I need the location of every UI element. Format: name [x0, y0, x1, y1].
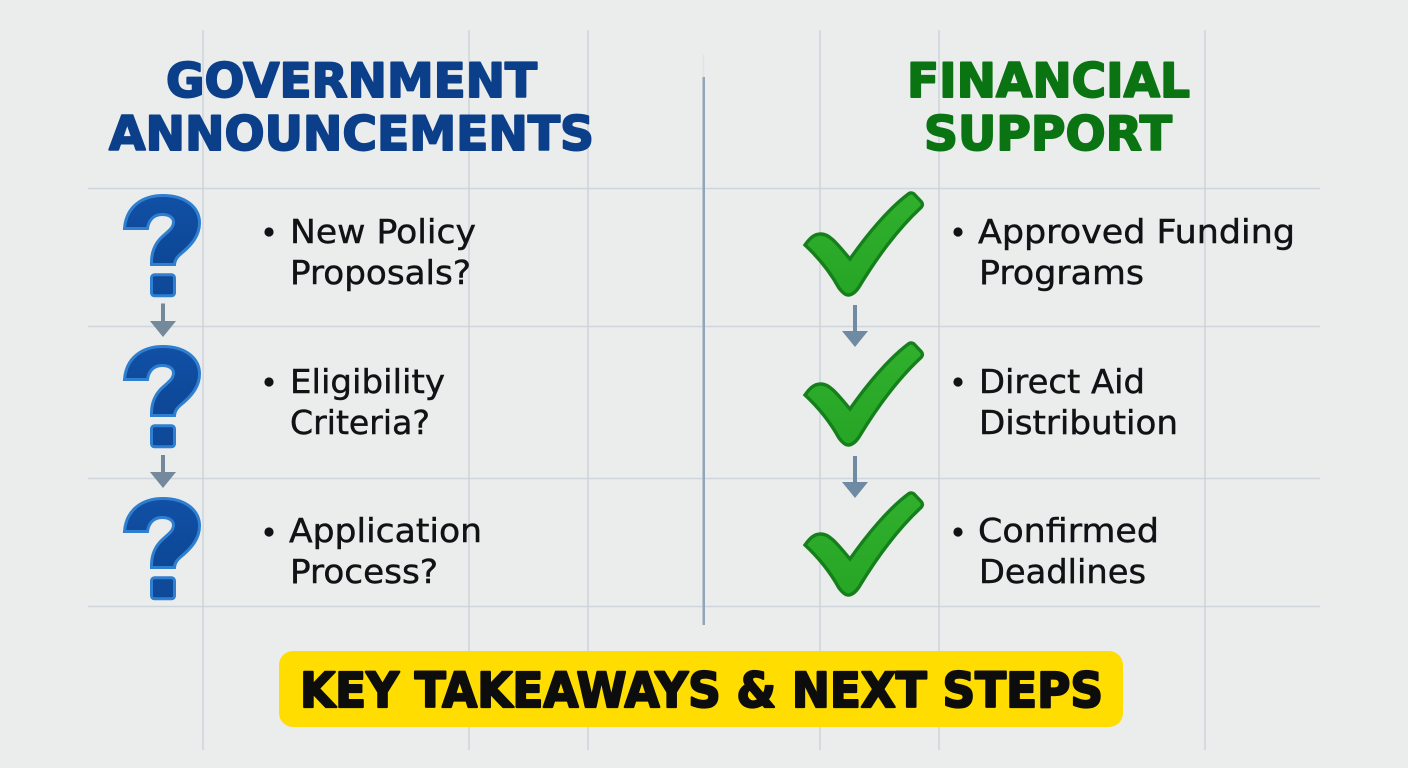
text: application process: Application [289, 511, 482, 550]
arrow: down 2 [150, 455, 176, 488]
text: application process: Process? [290, 552, 438, 591]
icon: check mark 3 [805, 493, 922, 595]
left column: question items [124, 196, 200, 599]
text: approved funding programs [953, 212, 1295, 292]
icon: question mark 3 [124, 498, 200, 599]
text: eligibility criteria: Eligibility [290, 362, 445, 401]
text: eligibility criteria [264, 362, 445, 442]
icon: question mark 1 [124, 196, 200, 296]
text: direct aid distribution [953, 362, 1178, 442]
arrow: down 1 [150, 304, 176, 337]
text: direct aid distribution: Direct Aid [979, 362, 1145, 401]
heading: government announcements [109, 54, 594, 162]
icon: question mark 2 [124, 346, 200, 447]
center divider [702, 77, 705, 625]
banner: key takeaways: KEY TAKEAWAYS & NEXT STEPS [300, 663, 1103, 719]
icon: check mark 1 [805, 193, 922, 295]
arrow: down 4 [842, 456, 868, 498]
text: confirmed deadlines: Confirmed [978, 511, 1159, 550]
heading: financial support: FINANCIAL [907, 54, 1190, 109]
heading: government announcements: ANNOUNCEMENTS [109, 107, 594, 162]
text: new policy proposals: New Policy [290, 212, 476, 251]
icon: check mark 2 [805, 343, 922, 445]
heading: government announcements: GOVERNMENT [166, 54, 537, 109]
text: confirmed deadlines [953, 511, 1159, 591]
right column: check items [805, 193, 922, 595]
text: new policy proposals [264, 212, 476, 292]
text: new policy proposals: Proposals? [290, 253, 471, 292]
text: direct aid distribution: Distribution [979, 403, 1178, 442]
heading: financial support: SUPPORT [924, 107, 1172, 162]
heading: financial support [907, 54, 1190, 162]
text: approved funding programs: Approved Funding [978, 212, 1295, 251]
text: eligibility criteria: Criteria? [290, 403, 430, 442]
text: approved funding programs: Programs [979, 253, 1144, 292]
arrow: down 3 [842, 305, 868, 347]
text: application process [264, 511, 482, 591]
text: confirmed deadlines: Deadlines [979, 552, 1146, 591]
